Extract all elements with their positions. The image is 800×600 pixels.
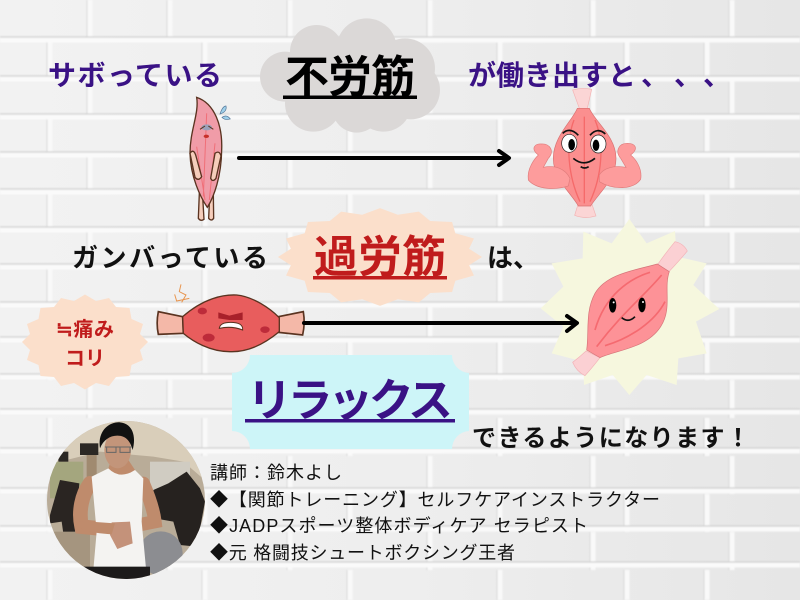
- label: ガンバっている: ガンバっている: [72, 243, 268, 273]
- cloud with heading 不労筋: 不労筋: [285, 53, 415, 102]
- icon: strong flexing muscle: [528, 88, 641, 218]
- icon: relaxed muscle on pale star: [541, 219, 719, 395]
- text: できるようになります: できるようになります！: [472, 425, 750, 452]
- peach badge with heading 過労筋: [278, 208, 482, 306]
- text block: instructor profile: ◆元 格闘技シュートボクシング王者: [210, 543, 515, 563]
- text block: instructor profile: ◆JADPスポーツ整体ボディケア セラピスト: [210, 516, 588, 536]
- arrow: lazy muscle to strong muscle: [239, 151, 509, 165]
- label: が働き出すと: が働き出すと、、、: [468, 59, 731, 91]
- peach badge: pain and stiffness: コリ: [65, 348, 105, 370]
- text block: instructor profile: [210, 463, 660, 563]
- icon: angry tense muscle: [157, 284, 304, 352]
- peach badge: pain and stiffness: [22, 294, 148, 390]
- cloud with heading 不労筋: [260, 18, 440, 133]
- icon: lazy thin muscle: [190, 97, 230, 220]
- arrow: tense muscle to relaxed muscle: [304, 316, 577, 331]
- label: は、: は、: [487, 243, 539, 273]
- cyan panel with heading リラックス: [232, 355, 469, 449]
- label: サボっている: サボっている: [48, 60, 222, 91]
- text block: instructor profile: ◆【関節トレーニング】セルフケアインストラクター: [210, 490, 660, 510]
- peach badge with heading 過労筋: 過労筋: [314, 233, 446, 282]
- text block: instructor profile: 講師：鈴木よし: [210, 463, 342, 483]
- peach badge: pain and stiffness: ≒痛み: [56, 318, 114, 341]
- photo: instructor in gym: [47, 420, 207, 582]
- cyan panel with heading リラックス: リラックス: [247, 375, 453, 426]
